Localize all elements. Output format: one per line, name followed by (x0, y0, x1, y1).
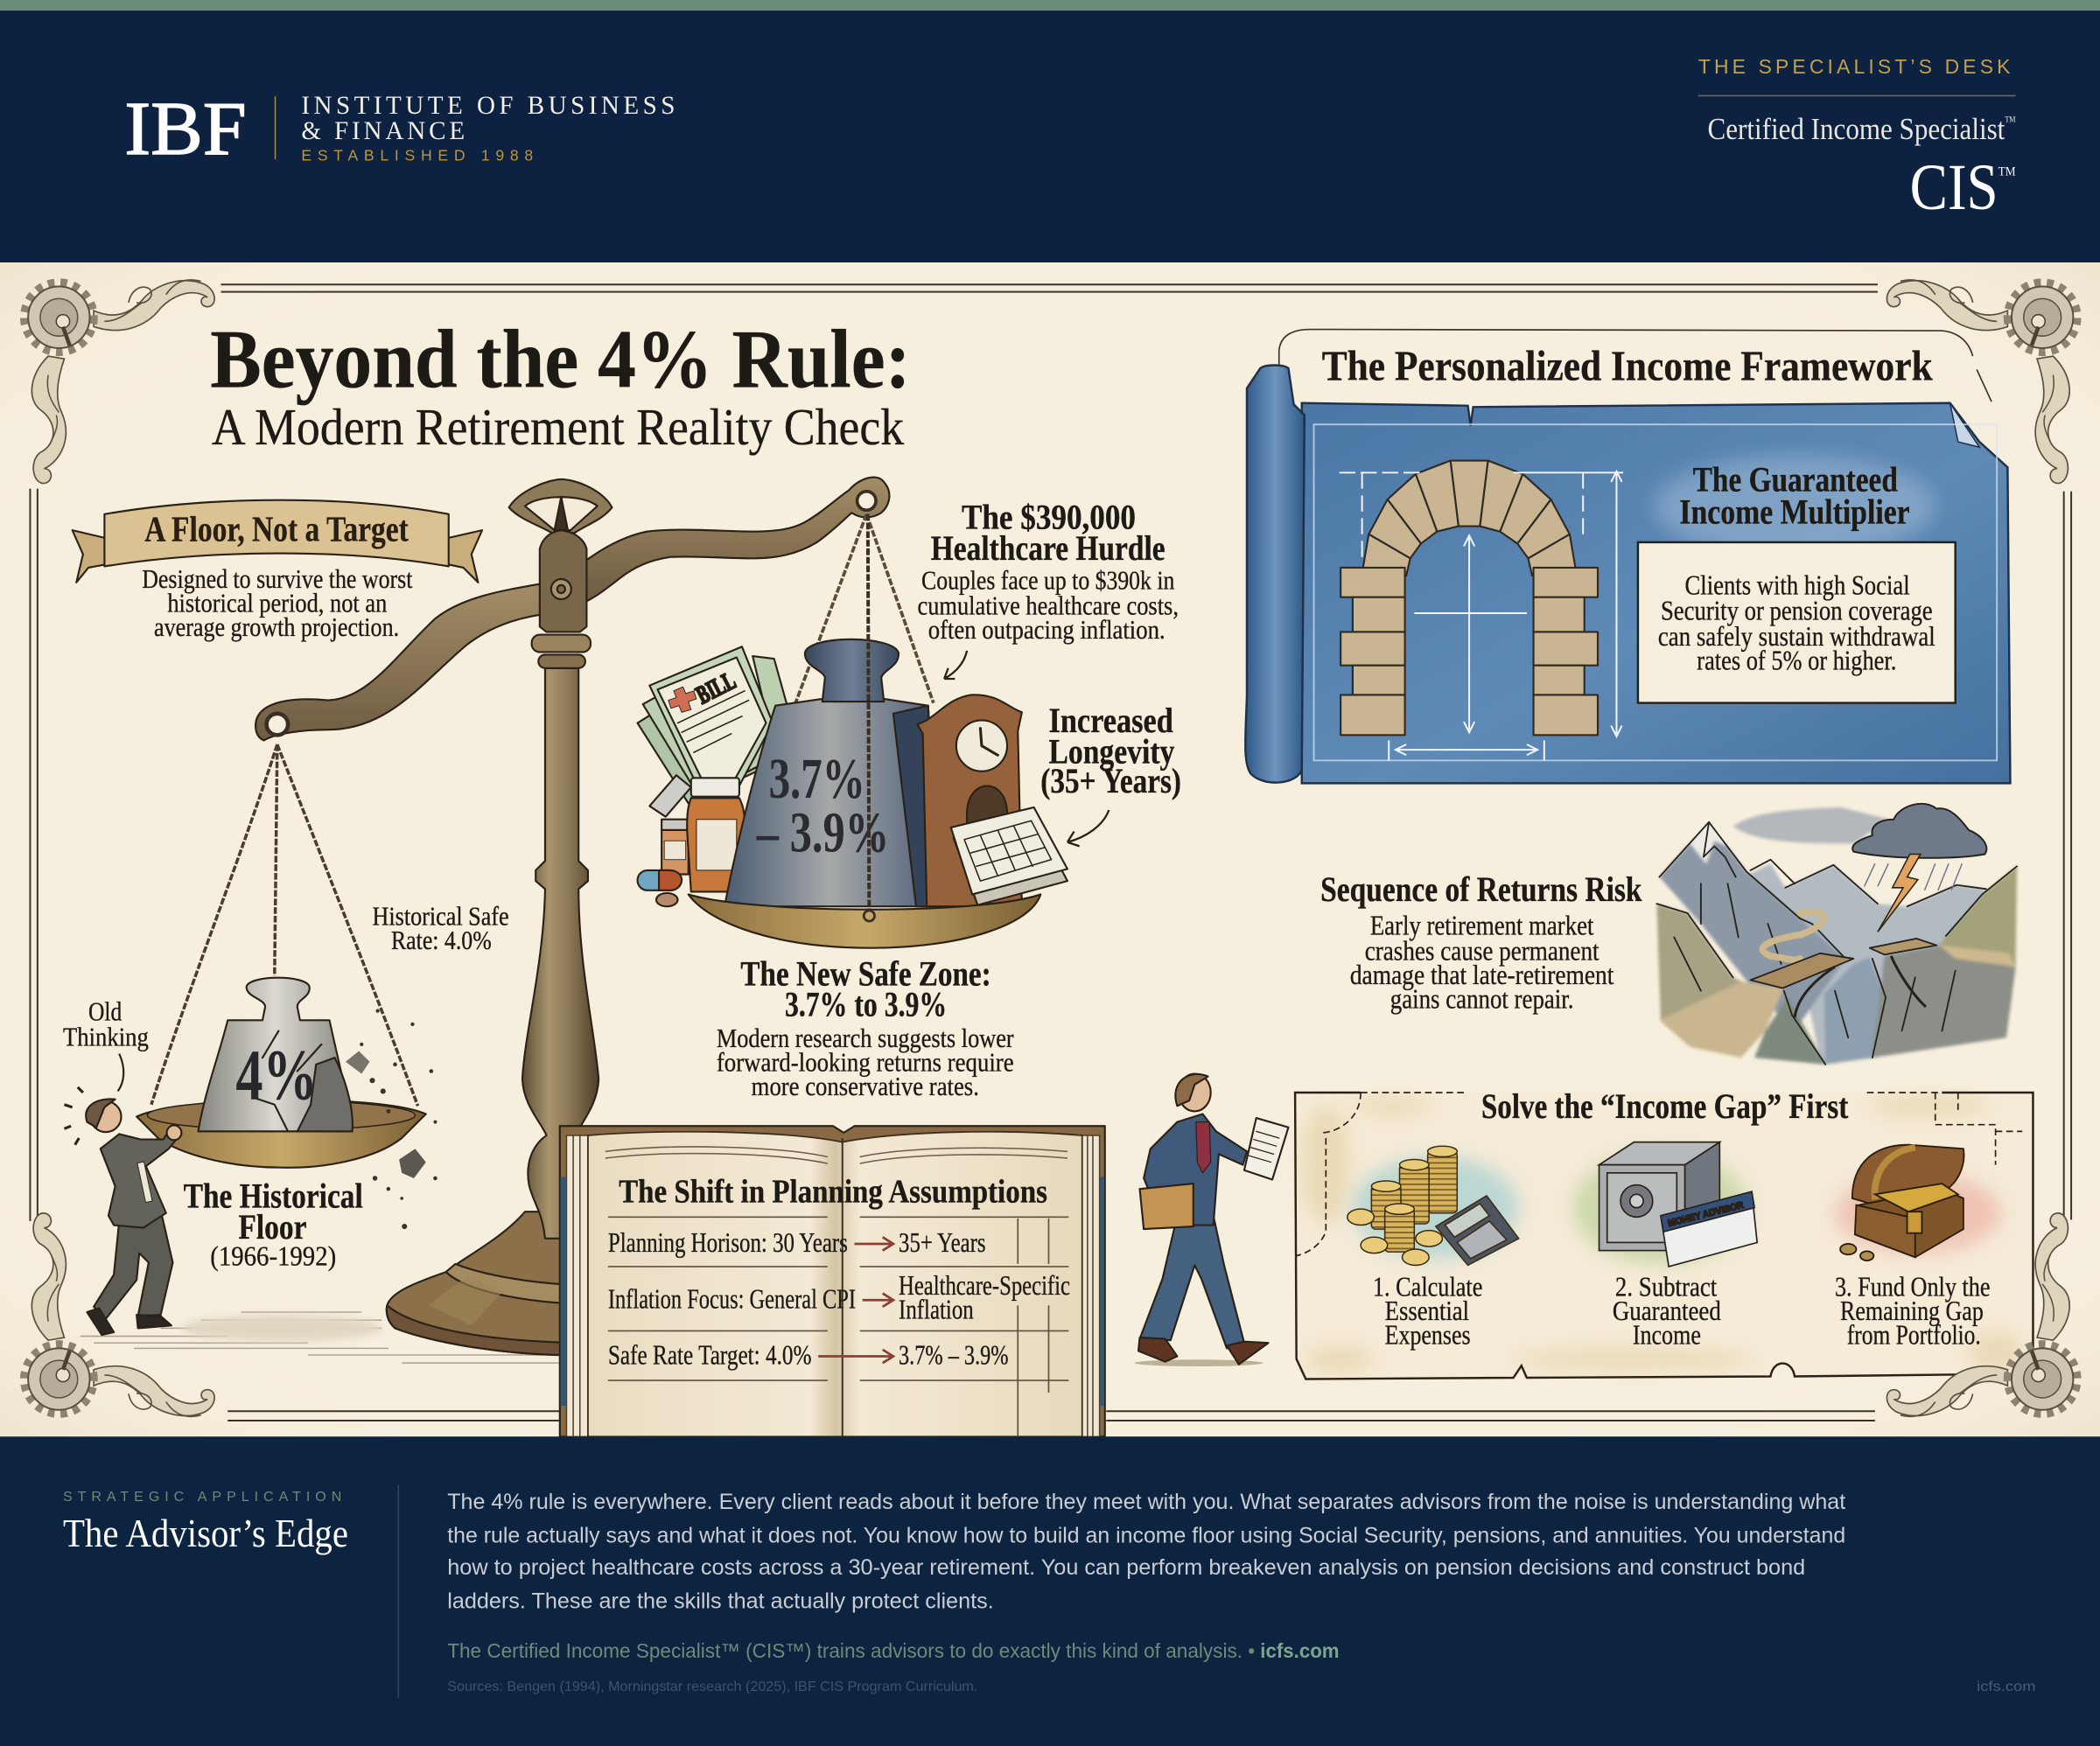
label: historical safe rate: Rate: 4.0% (391, 925, 492, 955)
book pages (588, 1132, 1082, 1436)
walking advisor (1134, 1074, 1288, 1366)
row: inflation focus (608, 1269, 1070, 1325)
trousers (94, 1211, 172, 1319)
step 1 label: Essential (1385, 1295, 1469, 1326)
callout: new safe zone: more conservative rates. (752, 1072, 979, 1101)
corner ornament: top right (1886, 280, 2077, 484)
label: the historical floor: The Historical (184, 1177, 363, 1216)
row: safe rate target (608, 1339, 1009, 1371)
shoes (1138, 1337, 1177, 1362)
pan hook (864, 911, 874, 921)
IBF logo (124, 86, 675, 171)
bills: BILL (692, 667, 740, 709)
row: safe rate target: Safe Rate Target: 4.0% (608, 1339, 812, 1371)
row: inflation focus: Inflation (899, 1294, 974, 1325)
shoes (87, 1308, 114, 1335)
label: old thinking (63, 996, 149, 1145)
balance scale (151, 478, 934, 1355)
book heading: The Shift in Planning Assumptions (619, 1173, 1047, 1210)
left chains (151, 744, 418, 1106)
corner ornament: bottom left (24, 1213, 214, 1416)
scale column (522, 668, 598, 1239)
corner ornament: bottom right (1886, 1213, 2077, 1416)
title (210, 312, 911, 456)
footer body text: how to project healthcare costs across a 30-year retirement. You can perform breakeven analysis on pension decisions and construct bond (447, 1555, 1805, 1580)
multiplier heading: Income Multiplier (1679, 492, 1910, 531)
callout: new safe zone: forward-looking returns require (717, 1047, 1014, 1077)
calendar (951, 807, 1068, 905)
page edges (566, 1135, 1100, 1436)
ink lines (1656, 822, 2017, 1065)
framework title frame (1279, 330, 1992, 402)
multiplier text box (1638, 542, 1956, 703)
ornamental border (30, 284, 2071, 1421)
folder (1140, 1184, 1194, 1229)
broken bridge (1751, 939, 1936, 1017)
multiplier text box: can safely sustain withdrawal (1658, 620, 1936, 652)
storm cloud (1852, 804, 1986, 858)
header band (0, 10, 2100, 264)
CIS credential block: THE SPECIALIST’S DESK (1698, 55, 2011, 78)
light halo behind heading (1654, 455, 1936, 557)
step 2 label: 2. Subtract (1615, 1271, 1717, 1303)
IBF logo: IBF (124, 86, 247, 171)
sequence of returns risk text: Sequence of Returns Risk (1320, 870, 1642, 909)
watercolour washes (1656, 807, 2017, 1065)
step 3 icon: treasure chest (1835, 1145, 2001, 1261)
multiplier text box: Clients with high Social (1685, 569, 1910, 601)
multiplier text box: rates of 5% or higher. (1697, 644, 1896, 675)
weight label: 3.7% (769, 747, 865, 811)
callout: increased longevity: Longevity (1048, 732, 1174, 771)
callout: new safe zone: The New Safe Zone: (740, 955, 991, 994)
footer sources: Sources: Bengen (1994), Morningstar research (2025), IBF CIS Program Curriculum. (447, 1679, 977, 1694)
map dashes (1297, 1093, 2022, 1256)
left pan: 4% weight (136, 978, 438, 1229)
aged stains (1302, 1095, 2022, 1372)
grandfather clock (917, 695, 1022, 906)
winding road (1762, 912, 1824, 960)
label: old thinking: Old (88, 996, 122, 1026)
inner frame (1314, 424, 1997, 760)
blueprint scroll (1245, 365, 2010, 783)
corner ornament: top left (24, 280, 214, 484)
legs (1140, 1216, 1244, 1348)
jacket (1144, 1114, 1247, 1226)
text: floor description: Designed to survive the worst (142, 564, 413, 594)
callout: increased longevity: Increased (1048, 702, 1173, 740)
label: the historical floor (184, 1177, 363, 1271)
weight label: – 3.9% (756, 800, 889, 864)
row: safe rate target: 3.7% – 3.9% (899, 1339, 1009, 1371)
step 1 label (1373, 1271, 1482, 1351)
callout: healthcare hurdle: Couples face up to $390k in (921, 565, 1174, 595)
CIS credential block: TM (1998, 165, 2016, 179)
scale base (387, 1212, 596, 1355)
weight label: 4% (235, 1035, 318, 1115)
CIS credential block: TM (2005, 115, 2016, 124)
step 2 icon: safe and card (1573, 1142, 1757, 1267)
parchment: solve the income gap (1295, 1087, 2033, 1379)
step 2 icon: safe and card: MONEY ADVISOR (1667, 1200, 1745, 1229)
row: planning horizon: 35+ Years (899, 1226, 986, 1258)
sequence of returns risk text: gains cannot repair. (1390, 983, 1573, 1015)
sequence of returns risk text: Early retirement market (1370, 909, 1593, 940)
callout: increased longevity (1040, 702, 1181, 846)
step 2 label: Guaranteed (1613, 1295, 1721, 1326)
footer call to action: icfs.com (1260, 1639, 1340, 1662)
pan (136, 1100, 426, 1168)
text: floor description: historical period, not an (167, 588, 387, 618)
parchment panel (0, 262, 2100, 1436)
crumbling debris (346, 1009, 438, 1229)
IBF logo: & FINANCE (301, 117, 465, 145)
row: inflation focus: Inflation Focus: General CPI (608, 1282, 856, 1314)
step 3 label: Remaining Gap (1840, 1295, 1984, 1326)
mountain illustration (1656, 804, 2017, 1065)
title: A Modern Retirement Reality Check (212, 398, 904, 456)
step 1 label: 1. Calculate (1373, 1271, 1482, 1303)
title: Beyond the 4% Rule: (210, 312, 911, 405)
CIS credential block: CIS (1910, 151, 1998, 224)
callout: healthcare hurdle (917, 499, 1179, 679)
row: planning horizon: Planning Horison: 30 Years (608, 1226, 848, 1258)
scale dial and finial (509, 479, 612, 668)
text: floor description (142, 564, 413, 642)
right chains (795, 514, 934, 703)
label: the historical floor: Floor (238, 1208, 307, 1247)
step 3 label (1835, 1271, 1990, 1351)
step 1 label: Expenses (1385, 1319, 1471, 1351)
footer body text: The 4% rule is everywhere. Every client reads about it before they meet with you. What separates advisors from the noise is understanding what (447, 1490, 1845, 1514)
scroll sheet (1302, 403, 2010, 783)
scroll roll (1245, 365, 1305, 783)
footer call to action: The Certified Income Specialist™ (CIS™) trains advisors to do exactly this kind of analysis. • (447, 1639, 1255, 1662)
heading: Solve the “Income Gap” First (1481, 1087, 1849, 1126)
multiplier heading: The Guaranteed (1693, 461, 1898, 499)
sequence of returns risk text: crashes cause permanent (1365, 934, 1600, 966)
rain (1865, 863, 1962, 890)
open book: planning assumptions (560, 1126, 1105, 1436)
footer left heading (63, 1489, 348, 1555)
head (90, 1101, 122, 1132)
weight label (756, 747, 889, 864)
text: floor description: average growth projection. (154, 612, 399, 642)
bills (638, 646, 790, 803)
torn outline (1295, 1093, 2033, 1379)
IBF logo: INSTITUTE OF BUSINESS (301, 92, 675, 120)
step 3 label: from Portfolio. (1847, 1319, 1981, 1351)
label: old thinking: Thinking (63, 1022, 149, 1051)
label: historical safe rate: Historical Safe (373, 902, 509, 932)
step 3 label: 3. Fund Only the (1835, 1271, 1990, 1303)
footer body text (447, 1490, 1845, 1613)
worried man in old thinking (86, 1099, 181, 1335)
ground hatching (80, 1312, 563, 1363)
step 2 label: Income (1633, 1319, 1701, 1351)
label: the historical floor: (1966-1992) (210, 1240, 336, 1271)
centre chain (868, 514, 869, 918)
IBF logo: ESTABLISHED 1988 (301, 147, 533, 164)
multiplier heading (1679, 461, 1910, 531)
callout: new safe zone: Modern research suggests lower (717, 1023, 1014, 1053)
sequence of returns risk text: damage that late-retirement (1350, 959, 1614, 990)
callout: increased longevity: (35+ Years) (1040, 762, 1181, 800)
top accent bar (0, 0, 2100, 10)
CIS credential block (1698, 55, 2016, 224)
sequence of returns risk text (1320, 870, 1642, 1015)
footer left heading: STRATEGIC APPLICATION (63, 1489, 341, 1505)
callout: healthcare hurdle: Healthcare Hurdle (931, 529, 1166, 568)
banner: a floor, not a target: A Floor, Not a Target (144, 508, 409, 548)
footer url: icfs.com (1977, 1679, 2036, 1694)
multiplier text box: Security or pension coverage (1661, 595, 1933, 626)
callout: new safe zone (717, 955, 1014, 1101)
right pan: safe zone load (638, 514, 1068, 948)
framework title frame: The Personalized Income Framework (1322, 342, 1933, 390)
table rules (608, 1217, 1068, 1436)
scale beam (256, 478, 889, 740)
step 1 icon: coins and calculator (1348, 1146, 1519, 1265)
arch: stones (1340, 461, 1598, 735)
arch: blueprint dimension lines (1340, 471, 1623, 760)
book cover (560, 1126, 1105, 1436)
banner: a floor, not a target (73, 500, 482, 583)
CIS credential block: Certified Income Specialist (1708, 113, 2006, 146)
tie (1196, 1122, 1211, 1173)
footer body text: ladders. These are the skills that actually protect clients. (447, 1589, 994, 1613)
callout: healthcare hurdle: cumulative healthcare costs, (917, 591, 1179, 621)
footer left heading: The Advisor’s Edge (63, 1511, 348, 1555)
label: historical safe rate (373, 902, 509, 955)
callout: healthcare hurdle: often outpacing inflation. (928, 615, 1166, 645)
footer body text: the rule actually says and what it does not. You know how to build an income floor using Social Security, pensions, and annuities. You understand (447, 1523, 1845, 1547)
jacket (101, 1128, 179, 1228)
lightning (1878, 855, 1921, 932)
pan (689, 894, 1040, 948)
callout: new safe zone: 3.7% to 3.9% (785, 986, 947, 1024)
step 2 label (1613, 1271, 1721, 1351)
pills and bottles (638, 775, 745, 906)
callout: healthcare hurdle: The $390,000 (962, 499, 1136, 537)
head (1179, 1074, 1211, 1111)
footer band (0, 1436, 2100, 1746)
weight (724, 639, 934, 906)
paper (1244, 1118, 1288, 1179)
row: inflation focus: Healthcare-Specific (899, 1269, 1070, 1301)
weight (199, 978, 353, 1131)
